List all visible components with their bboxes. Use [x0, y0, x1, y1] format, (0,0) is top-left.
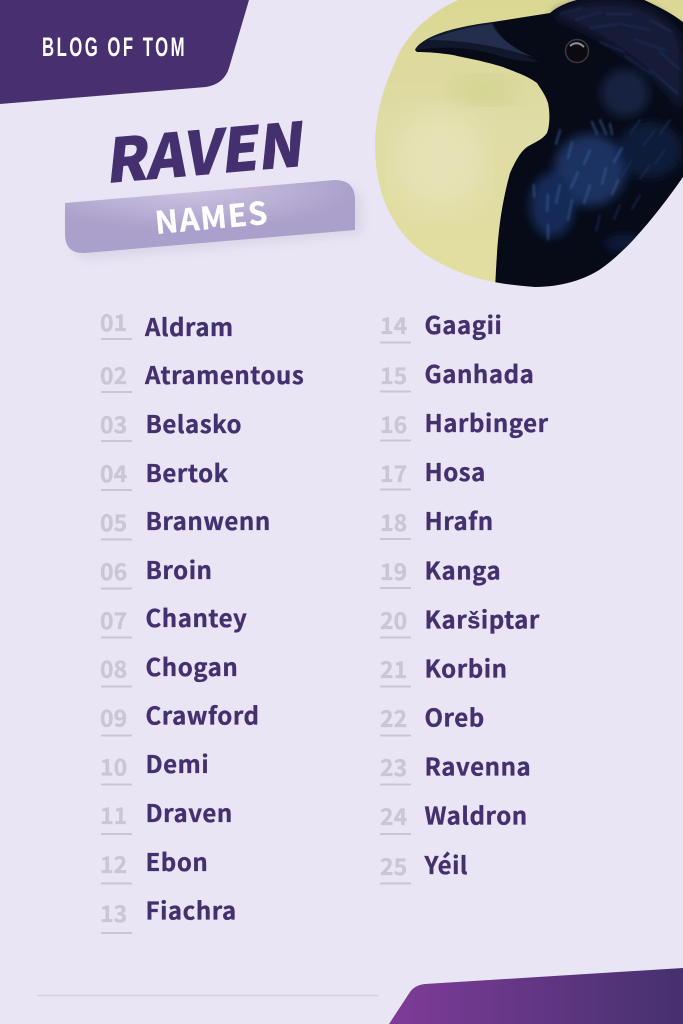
item 23: [380, 748, 531, 784]
neck feathers: [530, 122, 682, 251]
item 05: [100, 502, 271, 540]
item 22: [380, 698, 485, 736]
item 05: Branwenn: [146, 502, 271, 537]
item 07: Chantey: [146, 599, 247, 634]
head feather streaks: [560, 8, 680, 94]
item 18: [380, 502, 494, 539]
item 09: 09: [100, 700, 127, 734]
item 14: Gaagii: [424, 306, 502, 341]
item 12: Ebon: [146, 843, 208, 878]
item 17: 17: [380, 455, 407, 489]
item 16: Harbinger: [424, 404, 549, 439]
item 17: Hosa: [424, 453, 486, 488]
item 02: Atramentous: [144, 356, 304, 391]
item 15: Ganhada: [424, 355, 534, 390]
item 10: Demi: [146, 745, 209, 780]
item 20: 20: [380, 602, 407, 636]
item 24: [380, 796, 528, 834]
item 11: [100, 794, 233, 834]
item 15: [380, 355, 534, 392]
item 06: [100, 551, 212, 588]
item 13: 13: [100, 895, 127, 929]
item 11: Draven: [146, 794, 233, 829]
item 14: [380, 306, 502, 342]
item 19: Kanga: [424, 552, 501, 586]
item 19: [380, 552, 501, 588]
item 25: [380, 846, 468, 884]
item 14: 14: [380, 307, 407, 341]
item 25: Yéil: [424, 846, 468, 881]
item 12: [100, 843, 208, 884]
beak: [415, 22, 540, 62]
chest feather streaks: [534, 120, 622, 239]
item 01: [100, 304, 234, 343]
item 06: Broin: [146, 551, 212, 586]
item 19: 19: [380, 553, 407, 587]
item 03: [100, 405, 242, 441]
item 23: 23: [380, 749, 407, 783]
item 22: Oreb: [424, 698, 485, 734]
footer rule: [37, 994, 378, 996]
photo: raven in blob mask: [370, 0, 683, 290]
item 02: 02: [100, 357, 127, 391]
ear patch: [601, 69, 649, 117]
item 05: 05: [100, 504, 127, 538]
item 04: [100, 454, 229, 490]
subtitle bar: NAMES: [65, 180, 362, 259]
item 15: 15: [380, 357, 407, 391]
eye: [566, 40, 588, 62]
head plumage: [552, 1, 683, 110]
item 06: 06: [100, 553, 127, 587]
item 07: [100, 599, 247, 638]
item 16: 16: [380, 406, 407, 440]
item 12: 12: [100, 846, 127, 880]
footer corner shape: [389, 968, 683, 1024]
names list: right column: [380, 306, 549, 884]
item 13: Fiachra: [146, 892, 237, 926]
item 23: Ravenna: [424, 748, 531, 782]
item 13: [100, 892, 237, 933]
raven body: [415, 0, 683, 290]
item 17: [380, 453, 486, 490]
item 03: Belasko: [146, 405, 242, 440]
item 08: Chogan: [146, 648, 238, 683]
item 07: 07: [100, 602, 127, 636]
item 08: [100, 648, 238, 686]
item 22: 22: [380, 700, 407, 734]
item 21: Korbin: [424, 650, 508, 684]
item 04: Bertok: [146, 454, 229, 489]
item 10: 10: [100, 748, 127, 782]
header banner: [0, 0, 249, 104]
brand label: BLOG OF TOM: [42, 32, 187, 62]
title: RAVEN: RAVEN: [104, 97, 310, 201]
item 10: [100, 745, 209, 784]
item 08: 08: [100, 650, 127, 684]
item 01: Aldram: [144, 308, 234, 343]
item 21: 21: [380, 651, 407, 685]
item 24: Waldron: [424, 796, 528, 832]
item 18: 18: [380, 504, 407, 538]
item 11: 11: [100, 797, 127, 831]
item 20: Karšiptar: [424, 600, 540, 636]
item 24: 24: [380, 798, 407, 832]
names list: left column: [100, 304, 304, 933]
item 20: [380, 600, 540, 638]
subtitle text: NAMES: [153, 188, 270, 243]
item 25: 25: [380, 848, 407, 882]
item 21: [380, 650, 508, 686]
item 01: 01: [100, 304, 127, 338]
item 09: Crawford: [146, 696, 260, 732]
item 18: Hrafn: [424, 502, 494, 537]
item 03: 03: [100, 406, 127, 440]
item 09: [100, 696, 260, 736]
item 04: 04: [100, 455, 127, 489]
